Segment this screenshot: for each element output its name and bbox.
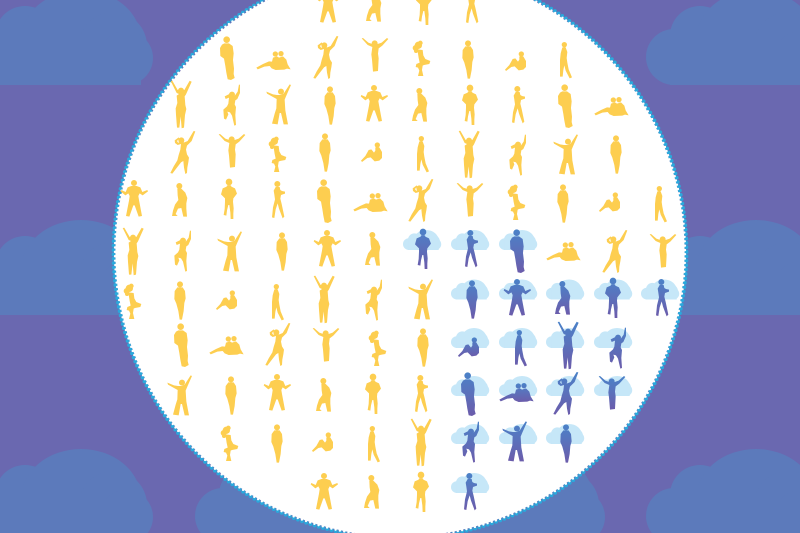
blue row 6 xyxy=(464,473,477,510)
blue row 4 xyxy=(461,372,625,416)
row 6 figures xyxy=(123,228,676,275)
cloud: middle right xyxy=(646,220,800,315)
cloud: top right xyxy=(646,0,800,85)
row 1 figures xyxy=(315,0,479,25)
blue row 5 xyxy=(462,421,572,463)
blue row 2 xyxy=(466,278,669,319)
row 3 figures xyxy=(171,81,629,128)
blue row 1 xyxy=(415,229,525,273)
white circle panel xyxy=(115,0,685,533)
row 7 figures xyxy=(124,276,433,323)
cloud: bottom left xyxy=(0,449,153,533)
row 10 figures xyxy=(221,419,432,466)
row 8 figures xyxy=(174,323,429,367)
cloud: middle left xyxy=(0,220,153,315)
cloud: bottom right xyxy=(646,449,800,533)
inner scallop of the circle edge xyxy=(115,0,685,533)
cloud: bottom centre right xyxy=(423,449,605,533)
row 11 figures xyxy=(311,472,429,512)
small pale clouds behind blue figures xyxy=(403,230,679,493)
row 4 figures xyxy=(170,131,622,178)
yellow crowd figures xyxy=(121,0,676,512)
row 2 figures xyxy=(220,36,572,80)
cloud: top left xyxy=(0,0,153,85)
row 5 figures xyxy=(121,179,667,223)
blue crowd figures xyxy=(415,229,669,510)
blue row 3 xyxy=(458,322,626,369)
row 9 figures xyxy=(167,374,428,415)
cloud: bottom centre left xyxy=(195,449,377,533)
scalloped circle border xyxy=(114,0,686,533)
